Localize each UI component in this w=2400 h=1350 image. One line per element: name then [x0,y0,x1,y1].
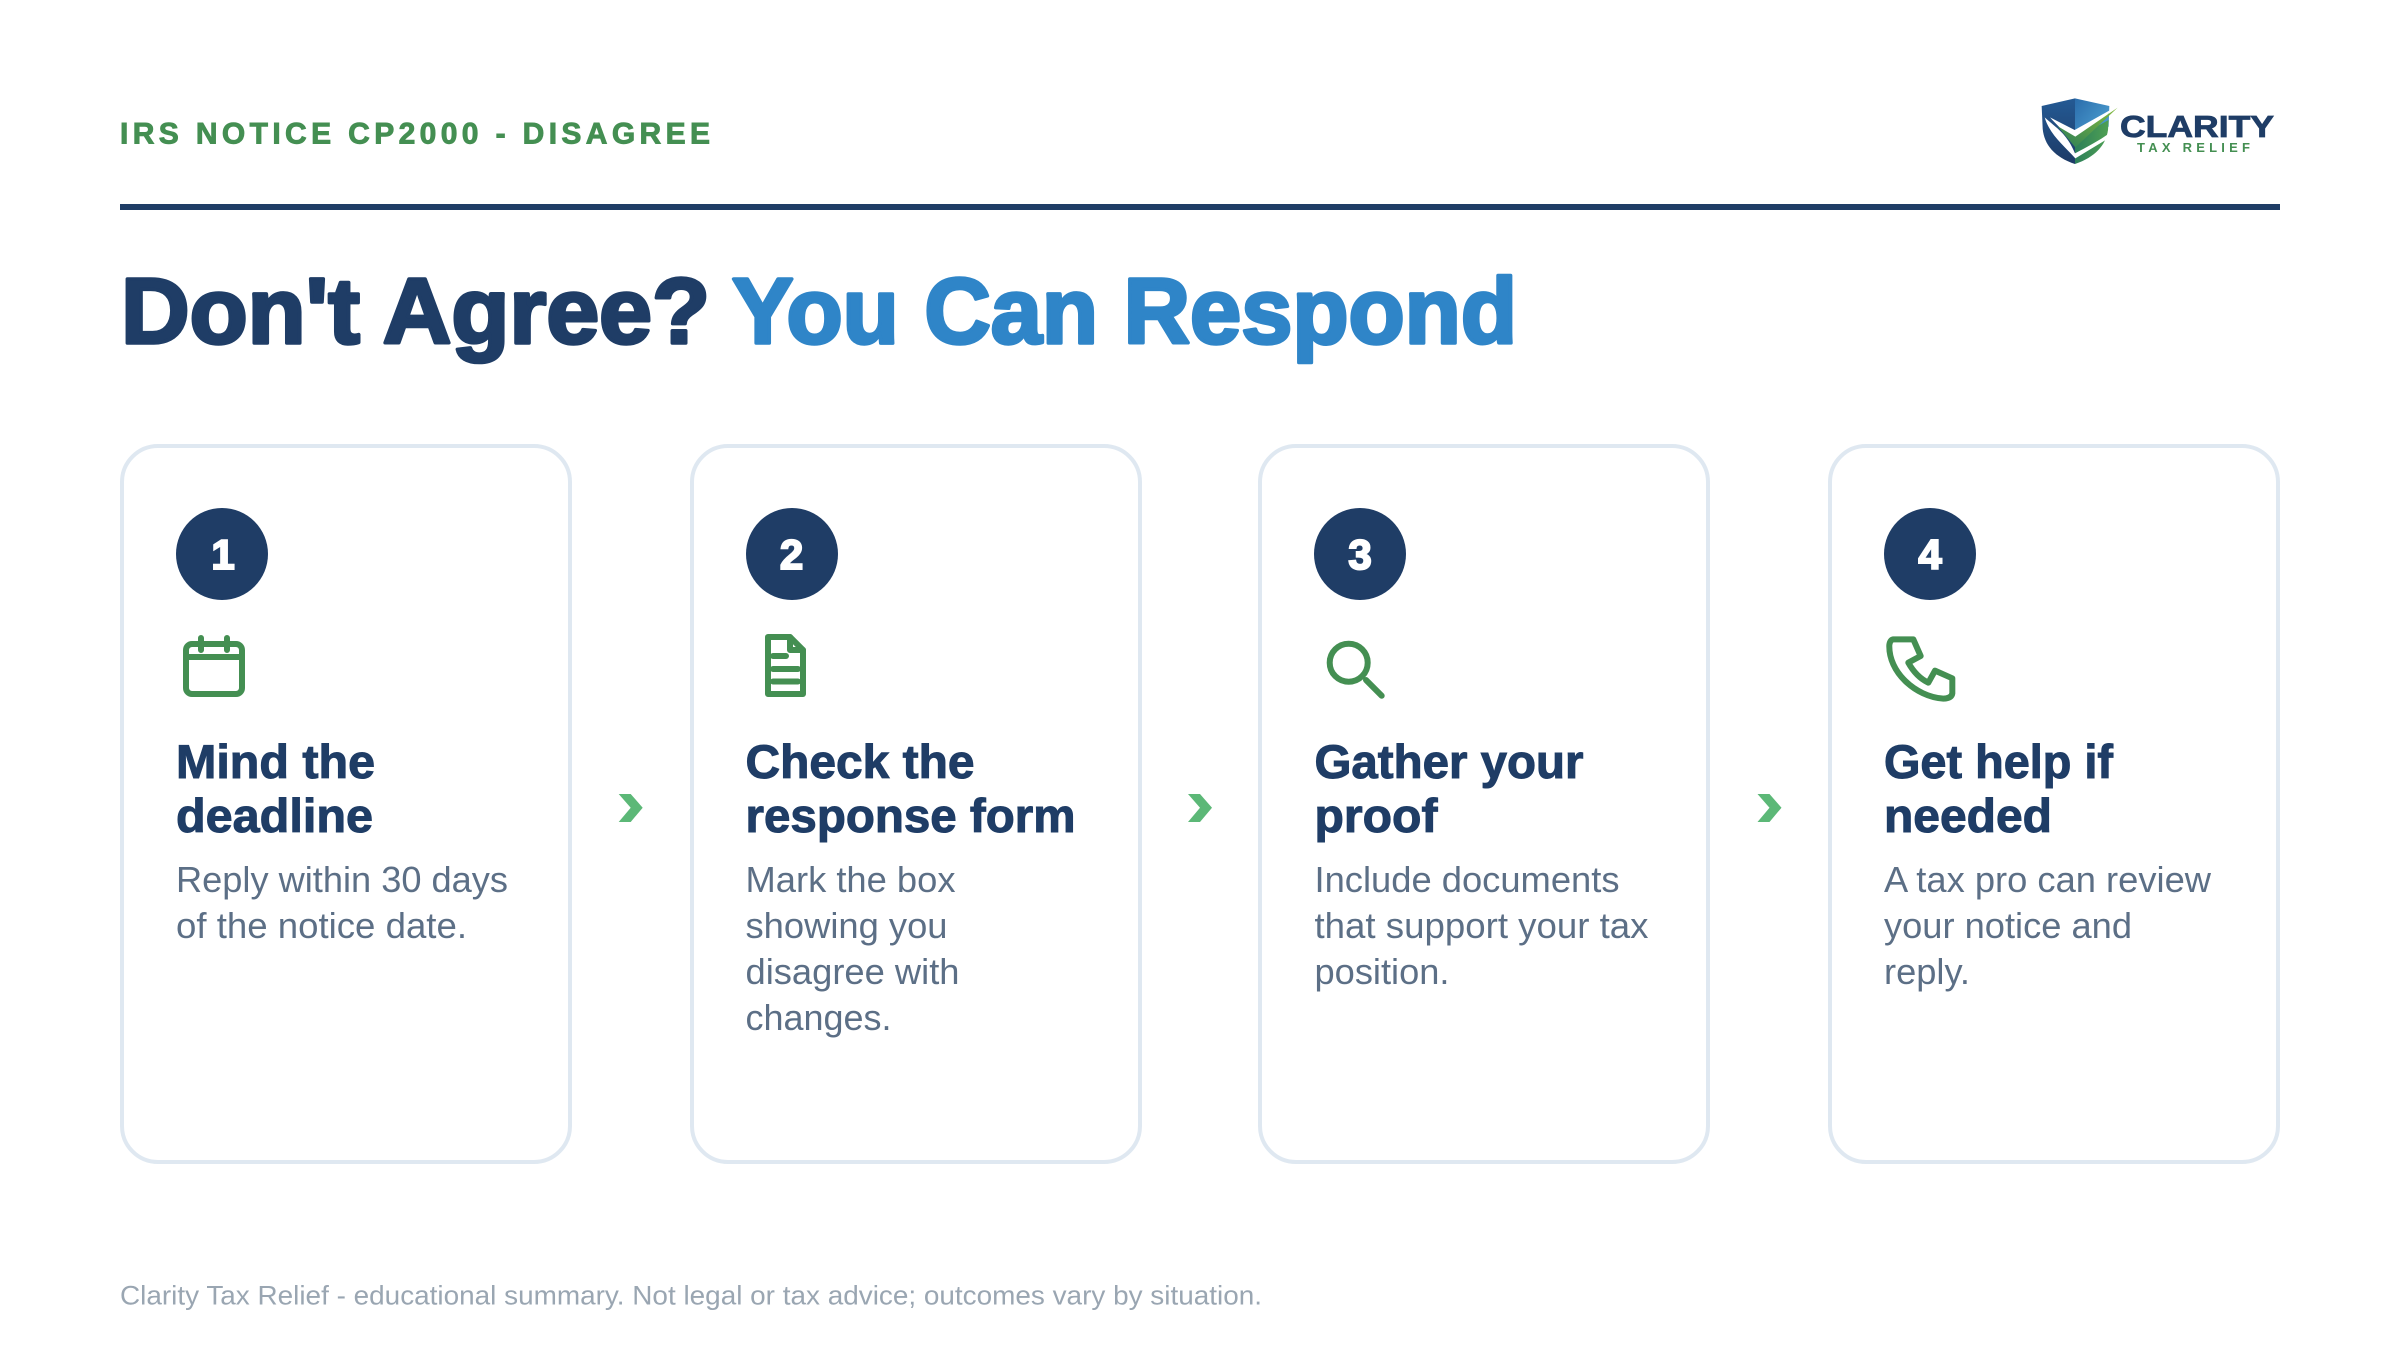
title [121,259,1517,363]
step 3 text: that support your tax [1314,905,1648,946]
logo shield icon [2042,98,2118,164]
step 4 text [1884,859,2212,992]
step 2 heading: Check the [746,735,974,788]
step 2 text: disagree with [746,951,960,992]
card border [1830,446,2278,1162]
step 3 text: position. [1314,951,1450,992]
step 2 heading: response form [746,789,1076,842]
step 2 text: Mark the box [746,859,956,900]
step 4 heading [1884,735,2113,842]
icon: calendar [186,638,242,694]
number badge 1: 1 [211,531,235,578]
panel: step 2 [692,446,1140,1162]
number badge 2: 2 [780,531,803,578]
step 2 heading [746,735,1076,842]
step 2 text: changes. [746,997,892,1038]
number badge 2 [746,508,838,600]
step 1 heading: deadline [176,789,373,842]
step 4 heading: needed [1884,789,2052,842]
icon: document [768,637,803,694]
logo tagline: TAX RELIEF [2137,140,2250,155]
step 4 text: your notice and [1884,905,2132,946]
number badge 4 [1884,508,1976,600]
panel: step 3 [1260,446,1708,1162]
icon: magnifier [1330,644,1382,696]
card border [692,446,1140,1162]
arrow 3 [1758,794,1782,822]
step 3 heading: proof [1314,789,1438,842]
step 1 text: Reply within 30 days [176,859,508,900]
step 1 text [176,859,508,946]
number badge 4: 4 [1918,531,1942,578]
footer disclaimer: Clarity Tax Relief - educational summary. Not legal or tax advice; outcomes vary by situation. [120,1280,1262,1310]
eyebrow heading: IRS NOTICE CP2000 - DISAGREE [120,118,710,150]
step 4 text: A tax pro can review [1884,859,2212,900]
step 3 heading [1314,735,1584,842]
step 3 text [1314,859,1648,992]
step 1 heading: Mind the [176,735,375,788]
panel: step 1 [122,446,570,1162]
arrow 1 [619,794,643,822]
icon: phone [1889,639,1952,699]
step 1 heading [176,735,375,842]
number badge 3: 3 [1348,531,1372,578]
step 2 text: showing you [746,905,948,946]
number badge 3 [1314,508,1406,600]
step 3 heading: Gather your [1314,735,1584,788]
title: dark part: Don't Agree? [121,259,710,363]
card border [1260,446,1708,1162]
step 2 text [746,859,960,1038]
header rule [120,204,2280,210]
step 1 text: of the notice date. [176,905,467,946]
step 4 heading: Get help if [1884,735,2113,788]
arrow 2 [1188,794,1212,822]
panel: step 4 [1830,446,2278,1162]
logo: Clarity Tax Relief [2042,98,2274,164]
logo wordmark: CLARITY [2120,109,2274,144]
number badge 1 [176,508,268,600]
step 4 text: reply. [1884,951,1970,992]
step 3 text: Include documents [1314,859,1620,900]
title: blue part: You Can Respond [732,259,1517,363]
card border [122,446,570,1162]
